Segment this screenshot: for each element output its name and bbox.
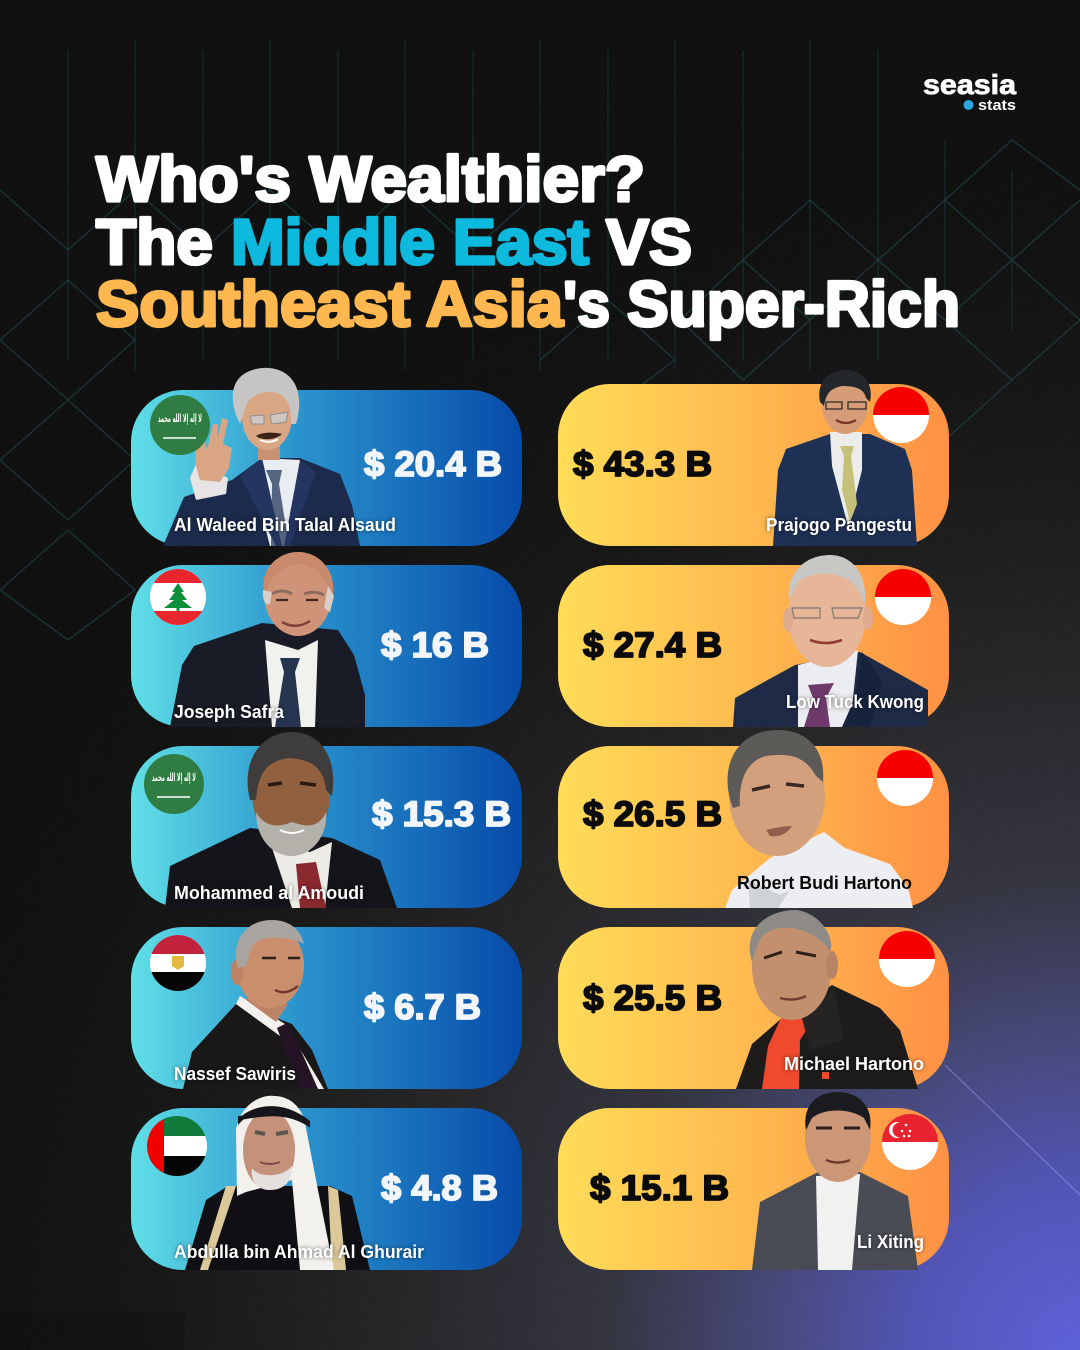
- name: Michael Hartono: [784, 1054, 924, 1074]
- flag: Indonesia: [879, 931, 935, 987]
- flag: Indonesia: [877, 750, 933, 806]
- name: Mohammed al Amoudi: [174, 883, 364, 903]
- flag: Indonesia: [873, 387, 929, 443]
- flag: Saudi Arabia: لا إله إلا الله محمد: [158, 412, 202, 425]
- portrait: Al Waleed: [163, 368, 360, 546]
- flag: Egypt: [150, 935, 206, 991]
- name: Nassef Sawiris: [174, 1064, 296, 1084]
- panel: Prajogo Pangestu: [558, 370, 949, 546]
- portrait: Li Xiting: [752, 1092, 918, 1270]
- value: $ 27.4 B: [583, 626, 722, 665]
- flag: Saudi Arabia: [144, 754, 204, 814]
- title: 's: [563, 268, 610, 340]
- value: $ 16 B: [381, 626, 489, 665]
- flag: United Arab Emirates: [147, 1116, 207, 1176]
- name: Al Waleed Bin Talal Alsaud: [174, 515, 396, 535]
- value: $ 26.5 B: [583, 795, 722, 834]
- logo: seasia stats: [923, 69, 1016, 114]
- portrait: Joseph Safra: [170, 552, 365, 727]
- portrait: Robert Budi Hartono: [725, 730, 913, 908]
- panel: Li Xiting: [558, 1092, 949, 1270]
- panel: Robert Budi Hartono: [558, 730, 949, 908]
- flag: Singapore: [882, 1114, 938, 1170]
- title: The: [96, 206, 213, 278]
- portrait: Michael Hartono: [736, 910, 918, 1089]
- title: [96, 143, 960, 340]
- panel: Michael Hartono: [558, 910, 949, 1089]
- portrait: Mohammed al Amoudi: [165, 732, 397, 908]
- logo: seasia stats: stats: [978, 97, 1016, 114]
- portrait: Nassef Sawiris: [183, 920, 328, 1089]
- portrait: Abdulla bin Ahmad Al Ghurair: [185, 1096, 370, 1270]
- value: $ 20.4 B: [364, 445, 502, 484]
- title: VS: [606, 206, 692, 278]
- value: $ 15.3 B: [372, 795, 511, 834]
- title: Who's Wealthier?: [96, 143, 645, 215]
- title: Middle East: [231, 206, 589, 278]
- name: Li Xiting: [857, 1232, 924, 1252]
- value: $ 4.8 B: [381, 1169, 498, 1208]
- flag: Indonesia: [875, 569, 931, 625]
- title: Super-Rich: [627, 268, 960, 340]
- flag: Lebanon: [150, 569, 206, 625]
- value: $ 6.7 B: [364, 988, 481, 1027]
- name: Abdulla bin Ahmad Al Ghurair: [174, 1242, 424, 1262]
- panel: Abdulla bin Ahmad Al Ghurair: [131, 1096, 522, 1270]
- flag: Saudi Arabia: [150, 395, 210, 455]
- panel: Low Tuck Kwong: [558, 555, 949, 727]
- portrait: Prajogo Pangestu: [773, 370, 917, 546]
- panel: Joseph Safra: [131, 552, 522, 727]
- name: Robert Budi Hartono: [737, 873, 912, 893]
- value: $ 43.3 B: [573, 445, 712, 484]
- flag: Saudi Arabia: لا إله إلا الله محمد: [152, 771, 196, 784]
- value: $ 15.1 B: [590, 1169, 729, 1208]
- name: Low Tuck Kwong: [786, 692, 924, 712]
- logo: seasia stats: seasia: [923, 69, 1016, 100]
- panel: Al Waleed Bin Talal Alsaud: [131, 368, 522, 546]
- portrait: Low Tuck Kwong: [733, 555, 928, 727]
- name: Prajogo Pangestu: [766, 515, 912, 535]
- panel: Mohammed al Amoudi: [131, 732, 522, 908]
- title: Southeast Asia: [96, 268, 563, 340]
- name: Joseph Safra: [174, 702, 285, 722]
- panel: Nassef Sawiris: [131, 920, 522, 1089]
- value: $ 25.5 B: [583, 979, 722, 1018]
